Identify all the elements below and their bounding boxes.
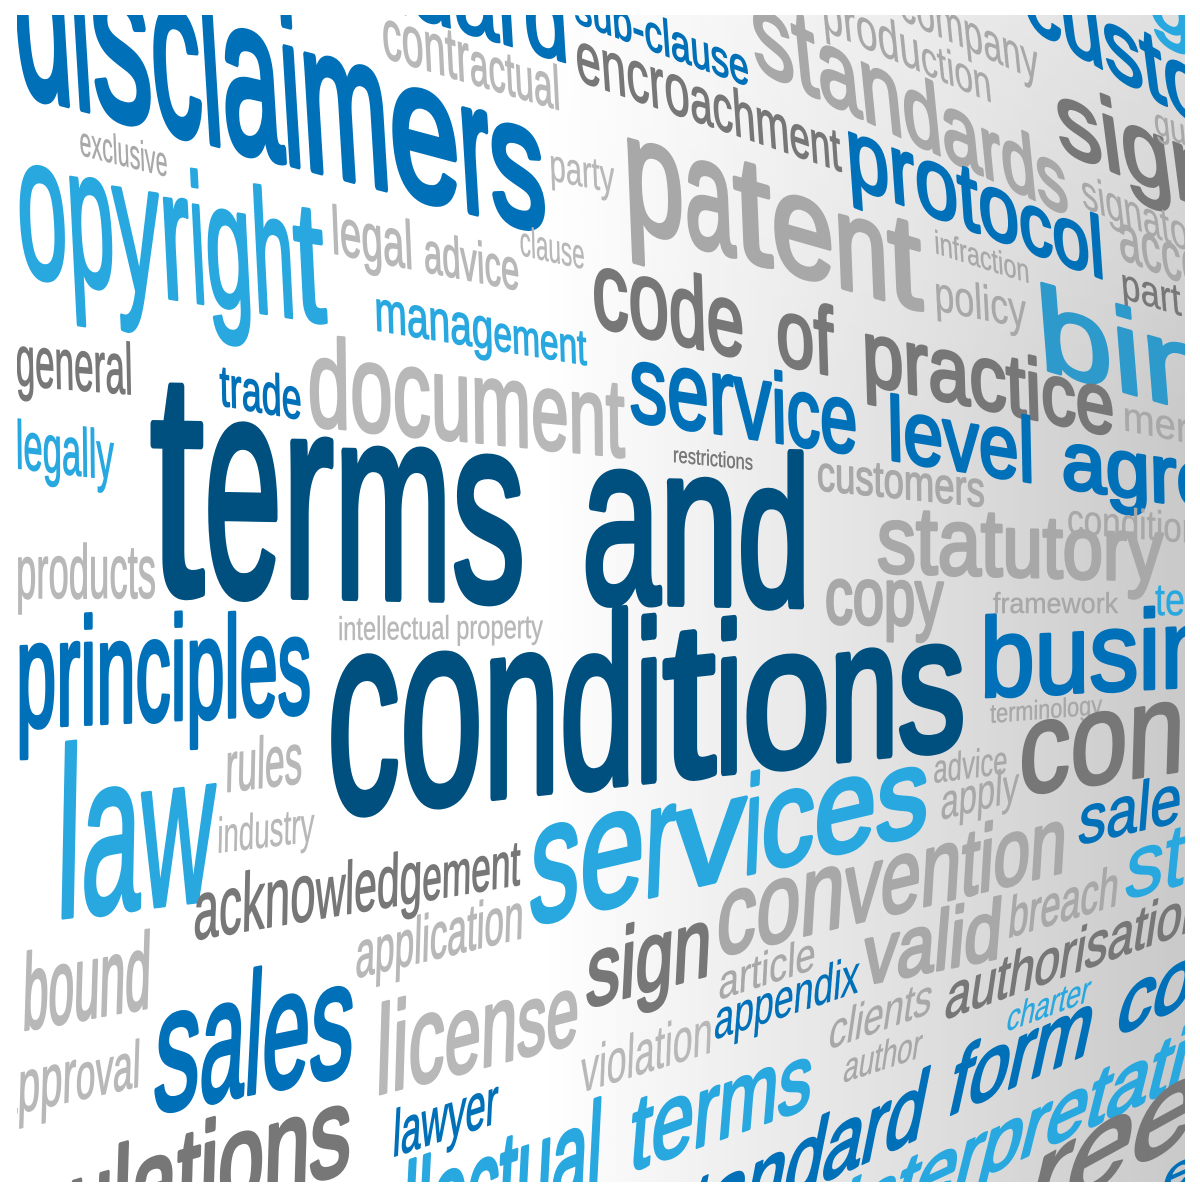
word: code: code	[590, 225, 746, 382]
word: industry: industry	[217, 797, 315, 864]
word: clients: clients	[825, 967, 937, 1062]
words: general	[15, 321, 133, 410]
word: practice: practice	[861, 300, 1116, 456]
word: level: level	[886, 379, 1035, 502]
word: guide: gu	[1152, 99, 1188, 154]
word: license: license	[374, 929, 581, 1122]
word: legally: legally	[15, 407, 114, 495]
word: author: author	[841, 1020, 926, 1093]
word: charter: charter	[1003, 968, 1095, 1041]
word: sales: sales	[150, 913, 360, 1152]
words: products	[16, 530, 156, 615]
word: terms bottom: terms	[626, 1009, 818, 1195]
word: valid: valid	[860, 881, 1006, 1004]
word: convention: convention	[714, 767, 1071, 982]
word: clause: clause	[519, 218, 585, 279]
word: document: document	[307, 312, 625, 484]
word: conditions: conditions	[327, 488, 965, 876]
word: encroachment: encroachment	[572, 14, 843, 188]
word: copyright: opyright	[11, 88, 329, 366]
word: terminology: terminology	[990, 690, 1103, 729]
word: framework: framework	[993, 588, 1118, 620]
word: management: management	[373, 278, 587, 378]
word: breach: breach	[1006, 852, 1122, 951]
word: party: party	[548, 138, 616, 203]
word: advice: advice	[933, 738, 1008, 792]
word: form: form	[940, 968, 1106, 1138]
word: restrictions: restrictions	[673, 442, 753, 475]
word: te fragment: te	[1155, 574, 1185, 625]
word: approval: approval	[0, 1019, 142, 1135]
word: of: of	[774, 276, 835, 396]
word: appendix: appendix	[712, 943, 862, 1052]
word: acknowledgement: acknowledgement	[193, 809, 522, 958]
word: patent: patent	[619, 76, 924, 346]
word: and: and	[582, 384, 810, 657]
word: violation: violation	[579, 997, 714, 1107]
word: st: st	[1121, 803, 1191, 920]
word: sign: sign	[584, 884, 715, 1030]
word: statutory: statutory	[877, 487, 1163, 602]
word: policy: policy	[933, 264, 1028, 339]
word: part: part	[1119, 257, 1183, 326]
word: terms: terms	[150, 303, 525, 668]
word: copy: copy	[825, 551, 943, 642]
word: legal advice: legal advice	[330, 192, 521, 305]
words: bound	[21, 910, 153, 1053]
word: application: application	[355, 879, 525, 993]
word: lawyer: lawyer	[391, 1064, 500, 1172]
word: trade: trade	[219, 353, 302, 433]
word: exclusive: exclusive	[79, 118, 168, 187]
word: infraction: infraction	[933, 224, 1030, 291]
word: law: law	[54, 683, 218, 970]
word: apply: apply	[939, 755, 1021, 831]
word: article: article	[717, 926, 817, 1011]
word: principles: principles	[16, 576, 311, 759]
word: customers: customers	[817, 445, 985, 518]
words: rules	[225, 719, 303, 808]
word: intellectual property: intellectual property	[338, 608, 543, 647]
word: protocol: protocol	[842, 93, 1107, 301]
word: service: service	[628, 322, 858, 478]
word: services: services	[527, 672, 933, 962]
